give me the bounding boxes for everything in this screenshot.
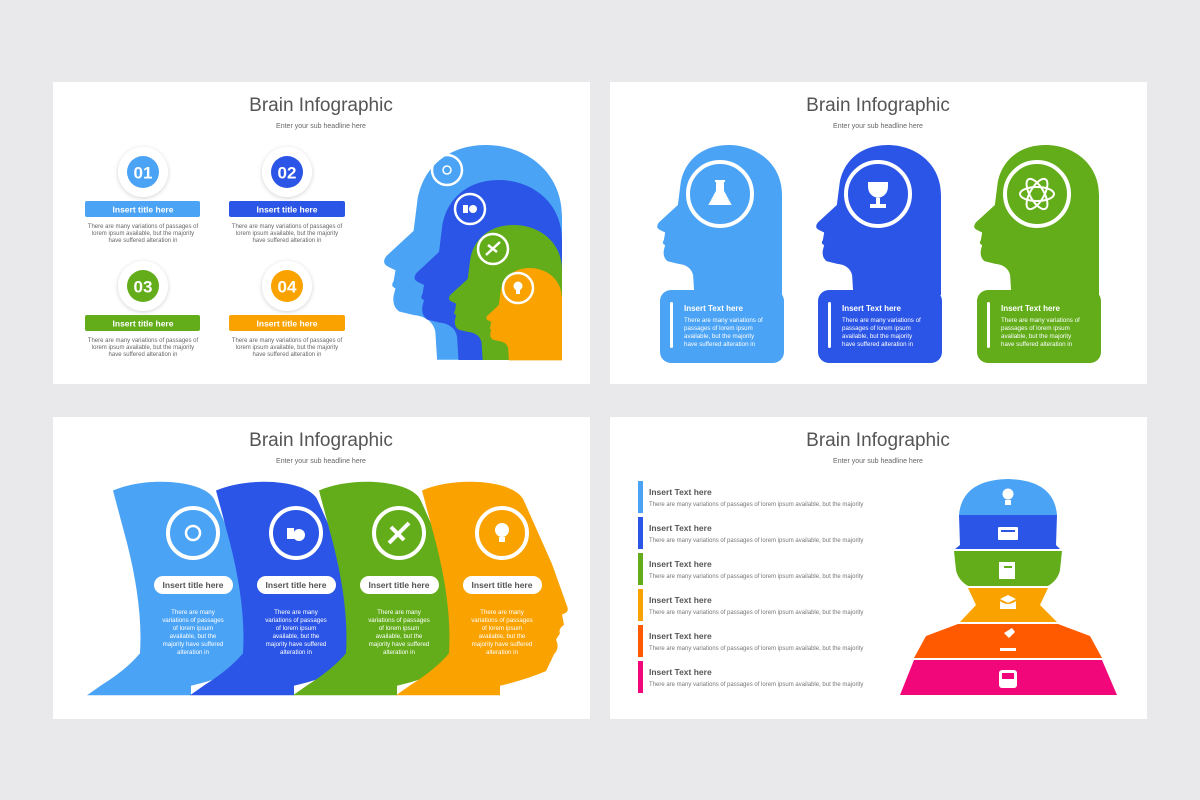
item 01: Insert title here	[113, 204, 174, 214]
list: There are many variations of passages of lorem ipsum available, but the majority	[649, 502, 863, 508]
panel: slide 4 layered bust	[610, 417, 1147, 719]
head card 3: There are many variations of	[1001, 317, 1080, 324]
head card 3: passages of lorem ipsum	[1001, 325, 1070, 332]
head 3: of lorem ipsum	[379, 625, 419, 632]
list: Insert Text here	[649, 523, 712, 533]
item 03: have suffered alteration in	[109, 352, 177, 358]
head 3: available, but the	[376, 633, 423, 640]
item 03	[85, 261, 200, 358]
item 04: 04	[278, 278, 297, 296]
list: Insert Text here	[649, 631, 712, 641]
item 03: lorem ipsum available, but the majority	[92, 345, 194, 351]
item 02	[229, 147, 345, 244]
item 04: have suffered alteration in	[253, 352, 321, 358]
head 1: majority have suffered	[163, 641, 224, 648]
item 03: There are many variations of passages of	[88, 338, 199, 344]
item 03: Insert title here	[113, 318, 174, 328]
item 01: have suffered alteration in	[109, 238, 177, 244]
list: Insert Text here	[649, 487, 712, 497]
head 3: Insert title here	[369, 580, 430, 590]
head 1: There are many	[171, 609, 216, 616]
list: Insert Text here	[649, 667, 712, 677]
head 3: There are many	[377, 609, 422, 616]
head card 1: available, but the majority	[684, 333, 755, 340]
head 1: variations of passages	[162, 617, 224, 624]
list: Insert Text here	[649, 559, 712, 569]
head card 1: passages of lorem ipsum	[684, 325, 753, 332]
head 2: Insert title here	[266, 580, 327, 590]
head card 2: have suffered alteration in	[842, 341, 914, 348]
head card 2: Insert Text here	[842, 304, 902, 313]
head 1: of lorem ipsum	[173, 625, 213, 632]
head card 1: Insert Text here	[684, 304, 744, 313]
head card 1: have suffered alteration in	[684, 341, 756, 348]
list: There are many variations of passages of lorem ipsum available, but the majority	[649, 610, 863, 616]
head card 2: passages of lorem ipsum	[842, 325, 911, 332]
item 02: lorem ipsum available, but the majority	[236, 231, 338, 237]
head 3	[293, 482, 465, 695]
title: Brain Infographic	[806, 430, 950, 451]
head 4	[396, 482, 568, 695]
item 02: Insert title here	[257, 204, 318, 214]
list: There are many variations of passages of lorem ipsum available, but the majority	[649, 682, 863, 688]
head card 1: There are many variations of	[684, 317, 763, 324]
item 02: 02	[278, 164, 296, 182]
title: Brain Infographic	[249, 430, 393, 451]
head 2: of lorem ipsum	[276, 625, 316, 632]
head card 3	[974, 145, 1101, 363]
head 4: available, but the	[479, 633, 526, 640]
subtitle: Enter your sub headline here	[833, 123, 923, 130]
panel: slide 3 four overlapping heads	[53, 417, 590, 719]
bust figure	[900, 479, 1117, 695]
stacked heads chart	[384, 145, 562, 360]
title: Brain Infographic	[249, 95, 393, 116]
item 01: 01	[134, 164, 152, 182]
subtitle: Enter your sub headline here	[833, 458, 923, 465]
item 04: There are many variations of passages of	[232, 338, 343, 344]
item 04: Insert title here	[257, 318, 318, 328]
head 4: variations of passages	[471, 617, 533, 624]
head 2: majority have suffered	[266, 641, 327, 648]
title: Brain Infographic	[806, 95, 950, 116]
head 4: of lorem ipsum	[482, 625, 522, 632]
panel: slide 2 three heads	[610, 82, 1147, 384]
head card 2: available, but the majority	[842, 333, 913, 340]
head card 3: available, but the majority	[1001, 333, 1072, 340]
subtitle: Enter your sub headline here	[276, 123, 366, 130]
head card 3: have suffered alteration in	[1001, 341, 1073, 348]
item 02: There are many variations of passages of	[232, 224, 343, 230]
item 04: lorem ipsum available, but the majority	[236, 345, 338, 351]
head 1: available, but the	[170, 633, 217, 640]
head 2: available, but the	[273, 633, 320, 640]
head 2	[190, 482, 362, 695]
list: Insert Text here	[649, 595, 712, 605]
item 02: have suffered alteration in	[253, 238, 321, 244]
head card 2	[816, 145, 942, 363]
head card 3: Insert Text here	[1001, 304, 1061, 313]
list: There are many variations of passages of lorem ipsum available, but the majority	[649, 574, 863, 580]
head card 2: There are many variations of	[842, 317, 921, 324]
head 2: variations of passages	[265, 617, 327, 624]
item 04	[229, 261, 345, 358]
head 3: variations of passages	[368, 617, 430, 624]
item 01	[85, 147, 200, 244]
head 1: Insert title here	[163, 580, 224, 590]
item 01: There are many variations of passages of	[88, 224, 199, 230]
panel: slide 1 numbered heads	[53, 82, 590, 384]
head 1	[87, 482, 259, 695]
subtitle: Enter your sub headline here	[276, 458, 366, 465]
head 4: majority have suffered	[472, 641, 533, 648]
head card 1	[657, 145, 784, 363]
head 3: alteration in	[383, 649, 416, 656]
head 1: alteration in	[177, 649, 210, 656]
list	[638, 481, 863, 693]
list: There are many variations of passages of lorem ipsum available, but the majority	[649, 538, 863, 544]
item 01: lorem ipsum available, but the majority	[92, 231, 194, 237]
head 2: There are many	[274, 609, 319, 616]
head 2: alteration in	[280, 649, 313, 656]
head 3: majority have suffered	[369, 641, 430, 648]
head 4: alteration in	[486, 649, 519, 656]
head 4: There are many	[480, 609, 525, 616]
head 4: Insert title here	[472, 580, 533, 590]
list: There are many variations of passages of lorem ipsum available, but the majority	[649, 646, 863, 652]
item 03: 03	[134, 278, 152, 296]
